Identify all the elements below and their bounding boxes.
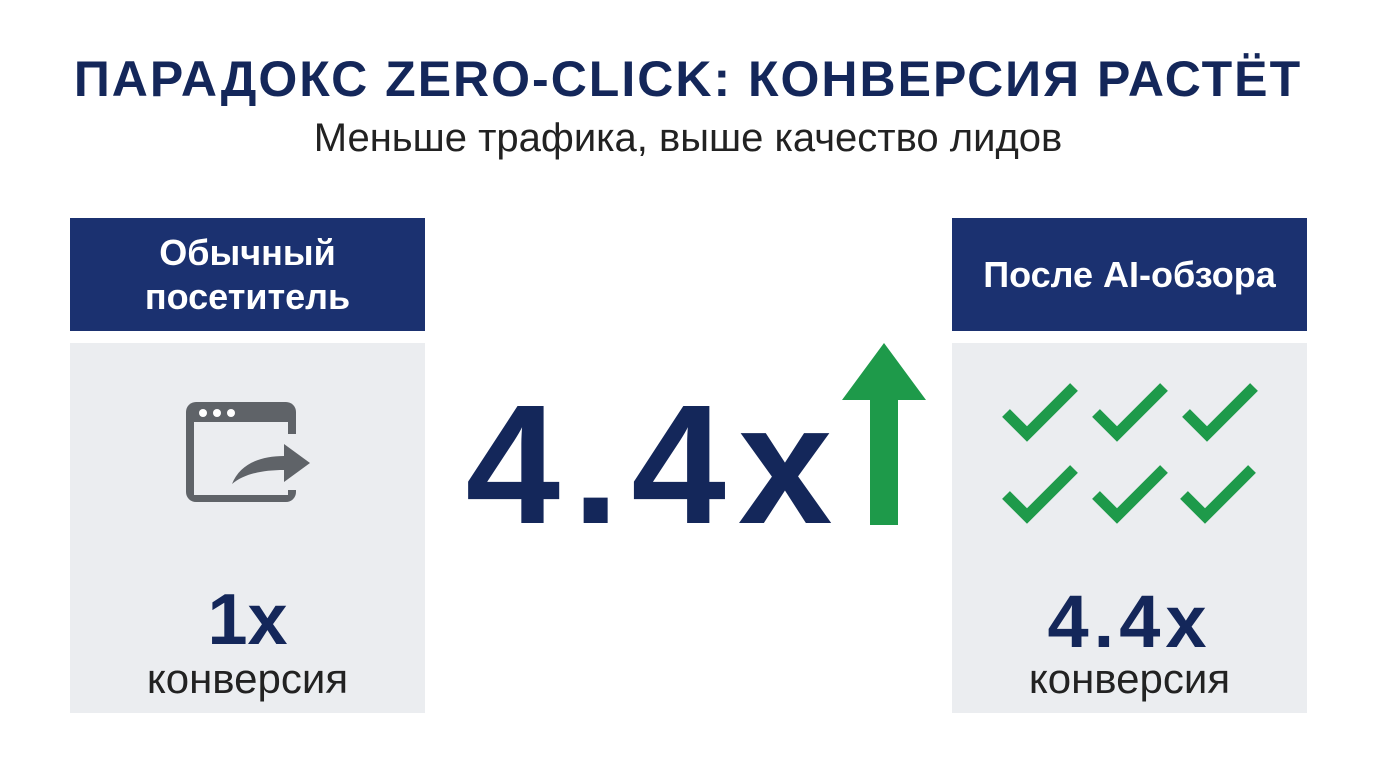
panel: right header: После AI-обзора [983, 254, 1276, 295]
panel: left header: Обычный [159, 232, 336, 273]
value: 4.4x: 4.4x [1047, 580, 1212, 663]
icon: green up arrow [842, 343, 926, 525]
panel: right header [952, 218, 1307, 331]
panel: left header [70, 218, 425, 331]
panel: right body [952, 343, 1307, 713]
label: конверсия [1029, 655, 1230, 702]
panel: left header: посетитель [145, 276, 350, 316]
icon: checkmarks [1002, 383, 1258, 524]
title: ПАРАДОКС ZERO-CLICK: КОНВЕРСИЯ РАСТЁТ [74, 51, 1302, 107]
subtitle: Меньше трафика, выше качество лидов [314, 116, 1062, 160]
label: конверсия [147, 655, 348, 702]
value: 1x: 1x [207, 580, 288, 660]
panel: left body [70, 343, 425, 713]
big stat: 4.4x [466, 370, 844, 560]
icon: browser exit [186, 402, 310, 502]
